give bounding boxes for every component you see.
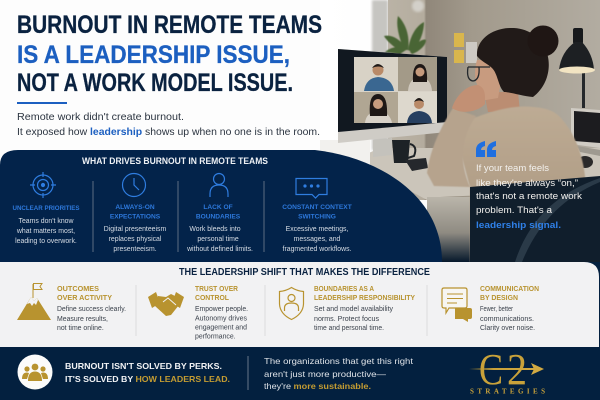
- logo: C2 Strategies: STRATEGIES: [470, 388, 545, 396]
- title: IS A LEADERSHIP ISSUE,: [17, 41, 290, 69]
- item: communication by design: communications.: [480, 316, 534, 323]
- column: always-on expectations: EXPECTATIONS: [110, 214, 161, 220]
- title: [17, 11, 322, 97]
- subtitle: It exposed how leadership shows up when no one is in the room.: [17, 127, 320, 138]
- item: outcomes over activity: [57, 284, 126, 332]
- callout: leadership signal quote: like they're always “on,”: [476, 177, 578, 188]
- icon: people in white circle: [18, 354, 52, 390]
- column: always-on expectations: ALWAYS-ON: [115, 204, 155, 211]
- icon: speech bubbles: [442, 288, 472, 322]
- panel: what drives burnout: [0, 150, 442, 262]
- text: sustainable organizations: [264, 356, 414, 391]
- hand: [452, 85, 485, 112]
- logo: C2 Strategies: [469, 345, 545, 396]
- torso: [452, 107, 585, 262]
- logo: C2 Strategies: 2: [507, 345, 527, 394]
- item: boundaries: norms. Protect focus: [314, 316, 380, 323]
- callout: leadership signal quote: If your team feels: [476, 162, 549, 173]
- title: BURNOUT IN REMOTE TEAMS: [17, 11, 322, 39]
- item: trust over control: TRUST OVER: [195, 284, 239, 293]
- glasses: [468, 67, 490, 81]
- callout: leadership signal quote: [476, 141, 582, 230]
- item: communication by design: Clarity over noise.: [480, 325, 535, 332]
- column: lack of boundaries: without defined limits.: [186, 246, 253, 253]
- column: lack of boundaries: personal time: [197, 236, 239, 243]
- column: lack of boundaries: Work bleeds into: [189, 226, 241, 233]
- item: trust over control: [195, 284, 248, 340]
- monitor: [338, 49, 447, 157]
- hair: [477, 28, 549, 97]
- item: outcomes over activity: OVER ACTIVITY: [57, 293, 112, 302]
- arm: [427, 108, 476, 187]
- video tile: woman in white: [398, 57, 437, 91]
- item: trust over control: engagement and: [195, 324, 247, 332]
- callout: leadership signal quote: leadership signal.: [476, 219, 561, 230]
- photo: woman on a video call at her desk: [320, 0, 600, 262]
- icon: handshake: [148, 292, 184, 316]
- title: NOT A WORK MODEL ISSUE.: [17, 69, 293, 97]
- text: perks statement: [65, 361, 230, 384]
- chair: [470, 176, 600, 262]
- item: boundaries: Set and model availability: [314, 306, 394, 313]
- column: constant context switching: fragmented workflows.: [283, 246, 352, 253]
- callout: leadership signal quote: problem. That's a: [476, 204, 553, 215]
- item: boundaries: BOUNDARIES AS A: [314, 284, 374, 293]
- logo: C2 Strategies: C: [479, 345, 503, 394]
- item: communication by design: BY DESIGN: [480, 293, 518, 302]
- column: lack of boundaries: LACK OF: [203, 204, 233, 211]
- item: trust over control: CONTROL: [195, 293, 230, 302]
- column: always-on expectations: Digital presenteeism: [104, 226, 166, 233]
- video tile: man in navy: [398, 92, 437, 123]
- mug and keyboard: [392, 140, 410, 163]
- item: boundaries: [314, 284, 415, 332]
- video tile: man in blue: [354, 57, 398, 91]
- icon: shield with person: [280, 288, 304, 320]
- item: trust over control: performance.: [195, 334, 236, 340]
- icon: target: [30, 172, 56, 198]
- column: lack of boundaries: BOUNDARIES: [196, 214, 241, 220]
- text: sustainable organizations: The organizations that get this right: [264, 356, 414, 366]
- column: unclear priorities: UNCLEAR PRIORITIES: [12, 205, 80, 212]
- woman: [427, 26, 600, 262]
- subtitle: [17, 112, 320, 138]
- column: always-on expectations: replaces physical: [109, 236, 162, 243]
- column: lack of boundaries: [186, 204, 253, 253]
- item: outcomes over activity: OUTCOMES: [57, 284, 99, 293]
- item: communication by design: Fewer, better: [480, 306, 514, 313]
- column: always-on expectations: [104, 204, 166, 253]
- item: outcomes over activity: Measure results,: [57, 316, 108, 323]
- icon: mountain with flag: [17, 284, 51, 320]
- plant: [384, 16, 426, 54]
- column: unclear priorities: what matters most,: [16, 228, 75, 235]
- icon: quote marks: [476, 141, 496, 157]
- text: sustainable organizations: they're more sustainable.: [264, 381, 371, 391]
- text: perks statement: IT'S SOLVED BY HOW LEADERS LEAD.: [65, 374, 230, 384]
- face: [475, 60, 505, 100]
- text: perks statement: BURNOUT ISN'T SOLVED BY PERKS.: [65, 361, 222, 371]
- item: boundaries: time and personal time.: [314, 325, 384, 332]
- column: constant context switching: messages, and: [294, 236, 341, 243]
- item: trust over control: Autonomy drives: [195, 316, 248, 322]
- column: constant context switching: SWITCHING: [298, 214, 336, 220]
- heading: leadership shift: THE LEADERSHIP SHIFT THAT MAKES THE DIFFERENCE: [179, 267, 430, 278]
- footer background: [0, 262, 600, 400]
- neck: [484, 92, 520, 112]
- panel: leadership shift: [0, 262, 599, 347]
- subtitle: Remote work didn't create burnout.: [17, 112, 184, 123]
- icon: clock: [122, 174, 146, 196]
- item: trust over control: Empower people.: [195, 306, 248, 313]
- item: communication by design: [480, 284, 539, 332]
- text: sustainable organizations: aren't just more productive—: [264, 369, 387, 379]
- footer: closing message: [18, 345, 545, 396]
- column: unclear priorities: Teams don't know: [19, 218, 73, 225]
- lamp: [559, 28, 595, 108]
- callout: leadership signal quote: that's not a remote work: [476, 190, 582, 201]
- column: constant context switching: Excessive meetings,: [286, 226, 348, 233]
- laptop: [571, 108, 600, 148]
- item: outcomes over activity: Define success clearly.: [57, 306, 126, 313]
- column: unclear priorities: [12, 205, 80, 245]
- icon: person: [210, 174, 228, 197]
- column: constant context switching: [282, 204, 352, 253]
- column: unclear priorities: leading to overwork.: [15, 238, 77, 245]
- icon: chat bubble: [296, 178, 327, 198]
- heading: what drives burnout: WHAT DRIVES BURNOUT IN REMOTE TEAMS: [82, 156, 268, 167]
- video tile: woman smiling: [354, 92, 398, 123]
- item: outcomes over activity: not time online.: [57, 325, 104, 332]
- column: constant context switching: CONSTANT CONTEXT: [282, 204, 352, 211]
- column: always-on expectations: presenteeism.: [113, 246, 157, 253]
- item: communication by design: COMMUNICATION: [480, 284, 539, 293]
- item: boundaries: LEADERSHIP RESPONSIBILITY: [314, 293, 415, 302]
- sticky notes: [454, 33, 464, 47]
- desk: [353, 148, 600, 200]
